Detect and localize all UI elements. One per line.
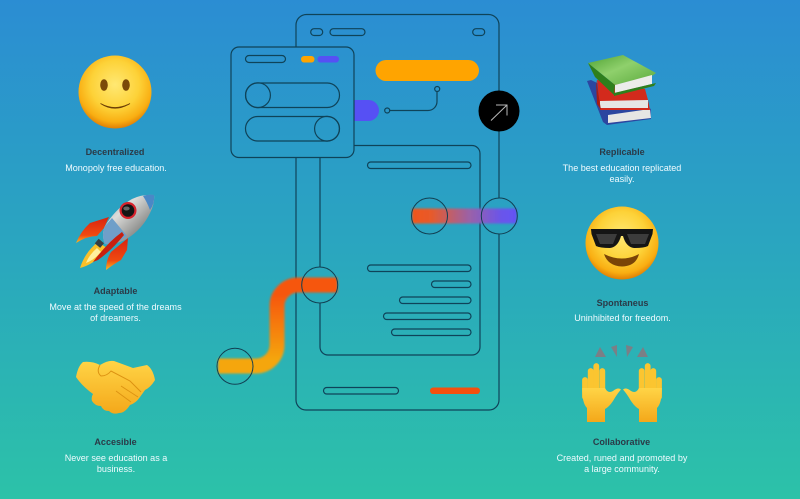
icon: books	[587, 55, 656, 125]
icon: rocket	[76, 195, 154, 270]
phone frame	[296, 14, 499, 410]
phone header pills	[311, 29, 485, 36]
text: collaborative: Collaborative	[593, 437, 650, 447]
inner content panel	[320, 146, 480, 355]
text: collaborative	[557, 437, 688, 474]
text: spontaneus: Uninhibited for freedom.	[574, 313, 671, 323]
text: collaborative: a large community.	[584, 464, 660, 474]
text: spontaneus: Spontaneus	[597, 298, 648, 308]
icon: arrow button	[478, 90, 520, 132]
text: decentralized: Monopoly free education.	[65, 163, 167, 173]
text: accesible: Never see education as a	[65, 453, 168, 463]
node circles	[217, 198, 517, 384]
text: replicable: Replicable	[599, 147, 645, 157]
text: collaborative: Created, runed and promoted by	[557, 453, 688, 463]
text: adaptable	[49, 286, 182, 323]
text: replicable	[563, 147, 681, 184]
text: adaptable: of dreamers.	[90, 313, 141, 323]
feature: decentralized	[65, 56, 167, 173]
gradient bar: curved orange to amber	[218, 285, 338, 366]
gradient bar: orange to blue	[412, 208, 517, 224]
content text pills	[324, 162, 471, 394]
text: accesible: Accesible	[94, 437, 137, 447]
icon: smiling face	[78, 56, 152, 128]
text: replicable: The best education replicated	[563, 163, 681, 173]
icon: sunglasses face	[586, 206, 658, 280]
text: replicable: easily.	[610, 174, 634, 184]
icon: raised hands	[582, 345, 662, 422]
text: accesible	[65, 437, 168, 474]
feature: accesible	[65, 361, 168, 474]
colored buttons	[354, 60, 480, 394]
text: accesible: business.	[97, 464, 135, 474]
feature: collaborative	[557, 345, 688, 474]
text: spontaneus	[574, 298, 671, 323]
text: decentralized	[65, 147, 167, 173]
feature: replicable	[563, 55, 681, 184]
feature: spontaneus	[574, 206, 671, 323]
phone illustration	[217, 14, 520, 410]
text: adaptable: Move at the speed of the dreams	[49, 302, 182, 312]
text: adaptable: Adaptable	[94, 286, 137, 296]
feature: adaptable	[49, 195, 182, 323]
connector line	[385, 86, 440, 113]
text: decentralized: Decentralized	[86, 147, 144, 157]
settings card	[231, 47, 354, 158]
icon: handshake	[76, 361, 155, 414]
